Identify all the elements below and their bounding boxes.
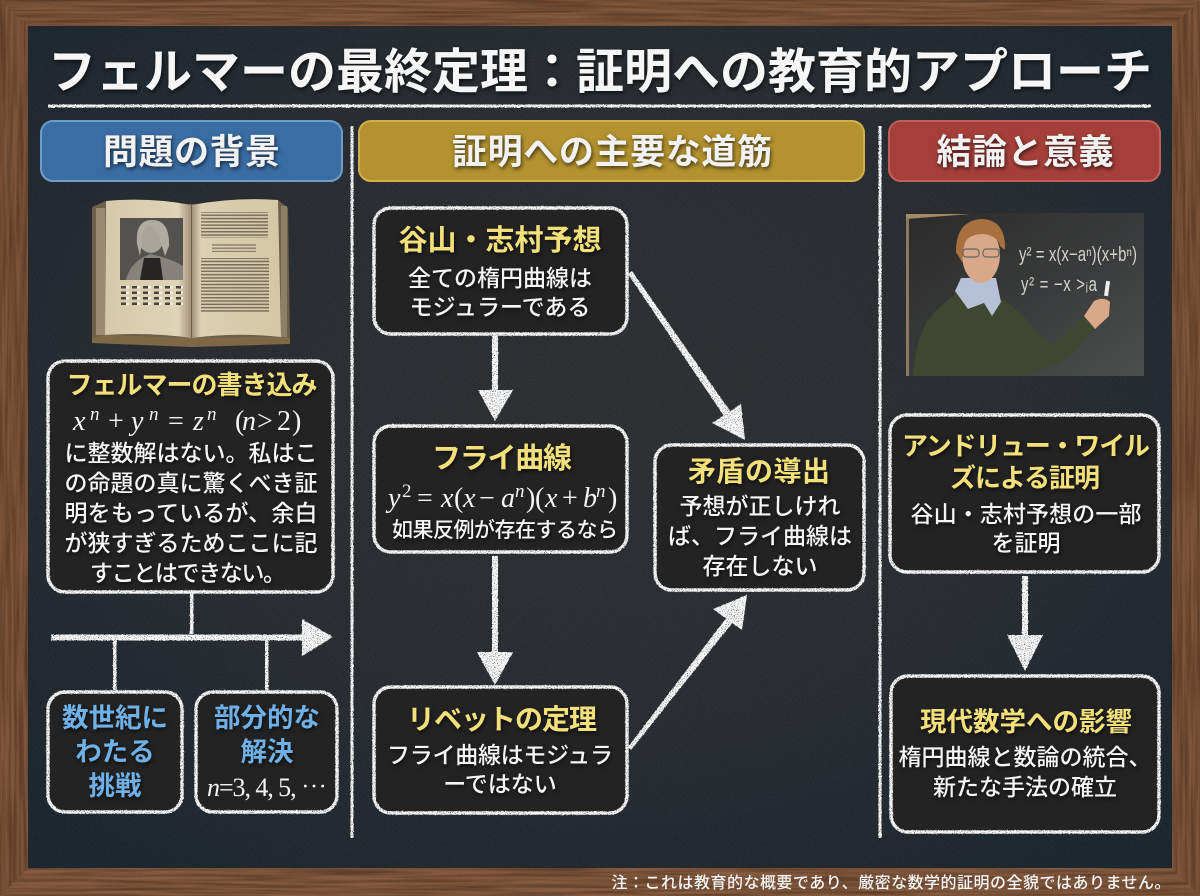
box: derivation of contradiction: 予想が正しけれ bbox=[680, 493, 840, 519]
note formula: = bbox=[168, 406, 184, 437]
box: Frey curve: ) bbox=[608, 483, 617, 514]
arrow: conjecture to contradiction bbox=[628, 271, 745, 440]
icon: open book with Fermat portrait bbox=[92, 199, 290, 347]
arrow: conjecture to Frey curve bbox=[478, 336, 513, 421]
box: Frey curve: )( bbox=[526, 483, 544, 514]
box: Frey curve bbox=[374, 426, 627, 552]
footnote: 注：これは教育的な概要であり、厳密な数学的証明の全貌ではありません。 bbox=[612, 874, 1170, 892]
note formula: z bbox=[192, 406, 204, 437]
box: Ribet's theorem: フライ曲線はモジュラ bbox=[387, 742, 613, 768]
box: Frey curve: x(x−a bbox=[441, 483, 515, 514]
box: centuries of challenge: 挑戦 bbox=[88, 771, 142, 801]
note formula: + bbox=[108, 406, 124, 437]
box: Taniyama-Shimura conjecture bbox=[374, 208, 627, 334]
box: Taniyama-Shimura conjecture: 全ての楕円曲線は bbox=[408, 265, 592, 291]
arrow: Frey curve to Ribet bbox=[477, 556, 513, 685]
box: Andrew Wiles's proof bbox=[890, 415, 1159, 572]
heading: conclusion: 結論と意義 bbox=[936, 133, 1114, 172]
box: centuries of challenge: わたる bbox=[75, 737, 155, 767]
note formula: n>2) bbox=[242, 406, 301, 437]
box: impact on modern mathematics: 楕円曲線と数論の統合、 bbox=[898, 744, 1152, 770]
box: derivation of contradiction: 矛盾の導出 bbox=[688, 456, 830, 487]
box: Andrew Wiles's proof: を証明 bbox=[992, 530, 1060, 556]
box: Frey curve: 如果反例が存在するなら bbox=[392, 519, 618, 542]
box: Frey curve: フライ曲線 bbox=[432, 442, 572, 475]
column divider right bbox=[878, 126, 882, 838]
box: Andrew Wiles's proof: アンドリュー・ワイル bbox=[902, 431, 1150, 461]
box: Ribet's theorem: ーではない bbox=[443, 771, 557, 797]
note body: の命題の真に驚くべき証 bbox=[64, 470, 318, 496]
heading: problem background: 問題の背景 bbox=[103, 133, 280, 172]
box: partial solutions: 解決 bbox=[240, 737, 294, 767]
heading: main path: 証明への主要な道筋 bbox=[452, 133, 772, 172]
note formula: n bbox=[207, 404, 216, 425]
note formula: y bbox=[128, 406, 144, 437]
heading: conclusion bbox=[889, 121, 1160, 181]
photo: Andrew Wiles at blackboard: y² = −x >ᵢa bbox=[1021, 273, 1097, 296]
note body: が狭すぎるためここに記 bbox=[64, 530, 318, 556]
arrow: proof to impact bbox=[1007, 576, 1043, 671]
box: partial solutions: n=3, 4, 5, ⋯ bbox=[207, 773, 327, 802]
panel: conclusion and significance bbox=[889, 121, 1160, 832]
box: impact on modern mathematics: 新たな手法の確立 bbox=[933, 774, 1117, 800]
box: Frey curve: y bbox=[385, 483, 401, 514]
note body: すことはできない。 bbox=[90, 560, 286, 586]
note body: に整数解はない。私はこ bbox=[64, 440, 318, 466]
box: derivation of contradiction: ば、フライ曲線は bbox=[668, 523, 852, 549]
box: Andrew Wiles's proof: 谷山・志村予想の一部 bbox=[910, 501, 1142, 527]
heading: problem background bbox=[41, 121, 342, 181]
heading: main path bbox=[359, 121, 864, 181]
note formula: n bbox=[90, 404, 100, 425]
note formula: x bbox=[72, 406, 86, 437]
panel: main path to the proof bbox=[359, 121, 864, 813]
note formula: n bbox=[149, 404, 158, 425]
title: フェルマーの最終定理：証明への教育的アプローチ bbox=[48, 46, 1152, 99]
photo: Andrew Wiles at blackboard: y² = x(x−aⁿ)(x+bⁿ) bbox=[1019, 243, 1137, 266]
box: Frey curve: x+b bbox=[545, 483, 597, 514]
note body: 明をもっているが、余白 bbox=[64, 500, 318, 526]
box: derivation of contradiction: 存在しない bbox=[702, 553, 818, 579]
callout: Fermat's note bbox=[48, 361, 333, 592]
note body bbox=[64, 440, 318, 586]
arrow: Ribet to contradiction bbox=[628, 595, 747, 750]
box: impact on modern mathematics bbox=[891, 676, 1159, 832]
box: Taniyama-Shimura conjecture: 谷山・志村予想 bbox=[398, 224, 602, 257]
title underline bbox=[48, 104, 1151, 108]
box: Andrew Wiles's proof: ズによる証明 bbox=[950, 463, 1100, 493]
box: Frey curve: 2 bbox=[402, 481, 412, 502]
box: Frey curve: n bbox=[515, 481, 524, 502]
box: Ribet's theorem bbox=[374, 687, 627, 813]
box: partial solutions bbox=[196, 692, 337, 812]
box: derivation of contradiction bbox=[655, 445, 864, 590]
box: centuries of challenge: 数世紀に bbox=[62, 703, 168, 733]
note formula: ( bbox=[235, 406, 244, 437]
box: Taniyama-Shimura conjecture: モジュラーである bbox=[410, 294, 590, 320]
box: centuries of challenge bbox=[48, 692, 182, 812]
box: impact on modern mathematics: 現代数学への影響 bbox=[920, 707, 1132, 737]
box: partial solutions: 部分的な bbox=[214, 703, 320, 733]
panel: problem background bbox=[41, 121, 342, 812]
timeline arrow with branches bbox=[51, 592, 333, 690]
box: Frey curve: = bbox=[417, 483, 433, 514]
box: Ribet's theorem: リベットの定理 bbox=[407, 704, 597, 735]
box: Frey curve: n bbox=[596, 481, 606, 502]
column divider left bbox=[350, 126, 354, 838]
photo: Andrew Wiles at blackboard bbox=[906, 213, 1144, 376]
note heading: フェルマーの書き込み bbox=[66, 370, 318, 400]
